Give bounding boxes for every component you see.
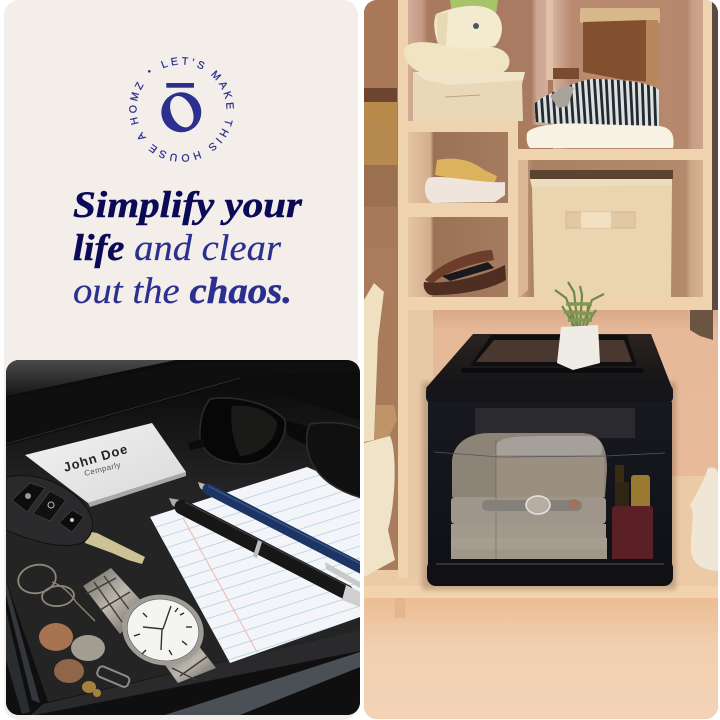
drawer lid — [426, 334, 672, 388]
headline line 1: Simplify your — [73, 185, 302, 226]
striped folded shirt — [534, 79, 659, 126]
logo ring — [161, 92, 201, 132]
jewelry bracelet — [482, 496, 582, 514]
shelf backs — [408, 0, 705, 300]
key rings — [16, 561, 95, 621]
wristwatch — [83, 568, 216, 683]
panel: closet shelf photo — [364, 0, 718, 719]
sunglasses right lens — [307, 423, 362, 498]
hanging item at right — [690, 310, 713, 340]
logo bar — [166, 83, 194, 88]
coins — [39, 623, 105, 697]
car key fob — [6, 476, 145, 564]
white knit cloth — [425, 177, 505, 203]
brown belts — [424, 250, 506, 295]
black pen — [169, 498, 360, 607]
beige storage box — [413, 72, 525, 121]
left wall and side boxes — [364, 0, 397, 207]
lower shelf and floor — [364, 476, 718, 719]
lined notepad — [150, 467, 360, 663]
headline line 3: out the chaos. — [73, 271, 292, 312]
panel: photo of organized drawer items — [6, 360, 365, 716]
logo badge — [129, 57, 234, 162]
bookcase frame — [398, 0, 712, 578]
drawer front rim — [6, 580, 360, 716]
lid front rim — [426, 384, 673, 404]
blue pen — [198, 482, 365, 588]
drawer upper wall — [6, 360, 360, 444]
circular slogan text: LET'S MAKE THIS HOUSE A HOMZ — [129, 57, 234, 162]
lower peach wall — [433, 310, 718, 476]
badge dot — [148, 70, 151, 73]
fabric storage cube — [530, 170, 673, 298]
rosemary plant — [555, 282, 604, 328]
plastic drawer unit — [426, 334, 673, 586]
headline — [73, 185, 302, 312]
white planter — [557, 325, 600, 370]
right wall sliver — [712, 0, 718, 340]
drawer floor — [6, 419, 360, 702]
drawer front reflection line — [434, 452, 665, 457]
drawer shadow — [422, 382, 676, 590]
paper clip — [96, 665, 131, 688]
perfume bottles — [615, 465, 650, 509]
white folded linen — [527, 123, 674, 148]
folded fabric stack — [451, 433, 607, 563]
drawer bottom rim — [427, 559, 673, 586]
headline line 2: life and clear — [73, 228, 281, 269]
business card — [25, 423, 186, 507]
clear drawer front — [428, 402, 672, 567]
card company: Cemparly — [83, 460, 121, 478]
lid recessed frame — [470, 335, 637, 366]
burgundy cup — [612, 506, 653, 562]
white sneaker — [690, 467, 718, 571]
brown woven box — [580, 8, 660, 85]
sunglasses — [188, 398, 312, 464]
card name: John Doe — [61, 441, 129, 475]
stuffed toy — [404, 0, 509, 77]
yellow folded cloth — [435, 159, 497, 182]
panel: cream headline panel — [4, 0, 358, 720]
cube handle — [566, 212, 635, 228]
tote bag — [364, 283, 397, 577]
